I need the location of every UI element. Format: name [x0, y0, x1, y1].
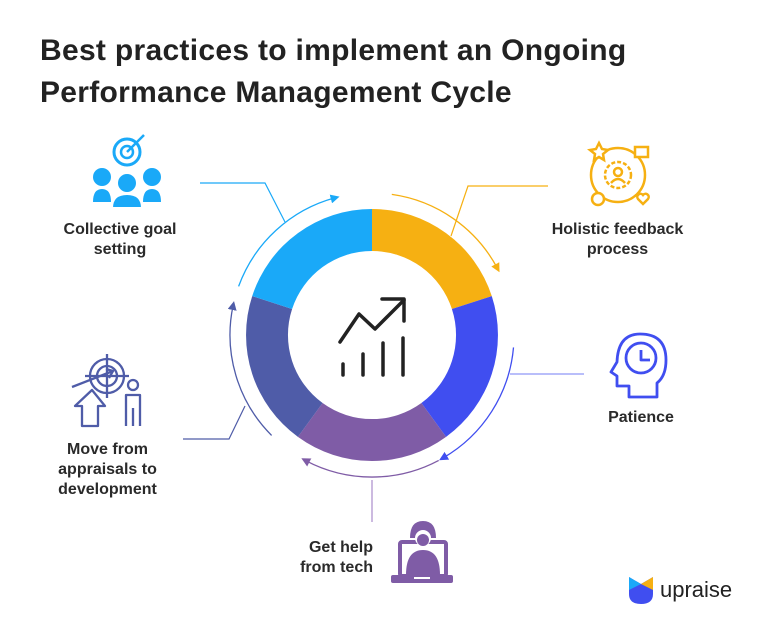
- label: holistic feedback: [552, 221, 684, 258]
- title: Best practices to implement an Ongoing: [40, 34, 626, 67]
- icon: target arrow person: [72, 354, 140, 426]
- label: get help from tech: [300, 539, 373, 576]
- icon: growth chart: [340, 299, 404, 375]
- label: holistic feedback: Holistic feedback: [552, 221, 683, 238]
- title: Performance Management Cycle: [40, 76, 512, 109]
- label: collective goal setting: Collective goal: [64, 221, 176, 238]
- label: holistic feedback: process: [587, 241, 648, 258]
- icon: team target: [93, 135, 161, 208]
- donut segments: [246, 209, 498, 461]
- icon: head clock: [611, 334, 666, 397]
- logo: upraise: upraise: [660, 577, 732, 602]
- label: get help from tech: Get help: [309, 539, 373, 556]
- label: patience: Patience: [608, 409, 674, 426]
- icon: laptop support: [391, 521, 453, 583]
- logo: upraise: [629, 577, 732, 604]
- icon: feedback gear: [590, 143, 649, 205]
- title: [40, 34, 626, 109]
- connector lines: [183, 183, 584, 522]
- label: move from appraisals: Move from: [67, 441, 148, 458]
- label: move from appraisals: appraisals to: [58, 461, 157, 478]
- label: move from appraisals: [58, 441, 157, 498]
- label: collective goal setting: [64, 221, 176, 258]
- label: move from appraisals: development: [58, 481, 157, 498]
- cycle arrows: [230, 194, 513, 477]
- label: collective goal setting: setting: [94, 241, 146, 258]
- label: get help from tech: from tech: [300, 559, 373, 576]
